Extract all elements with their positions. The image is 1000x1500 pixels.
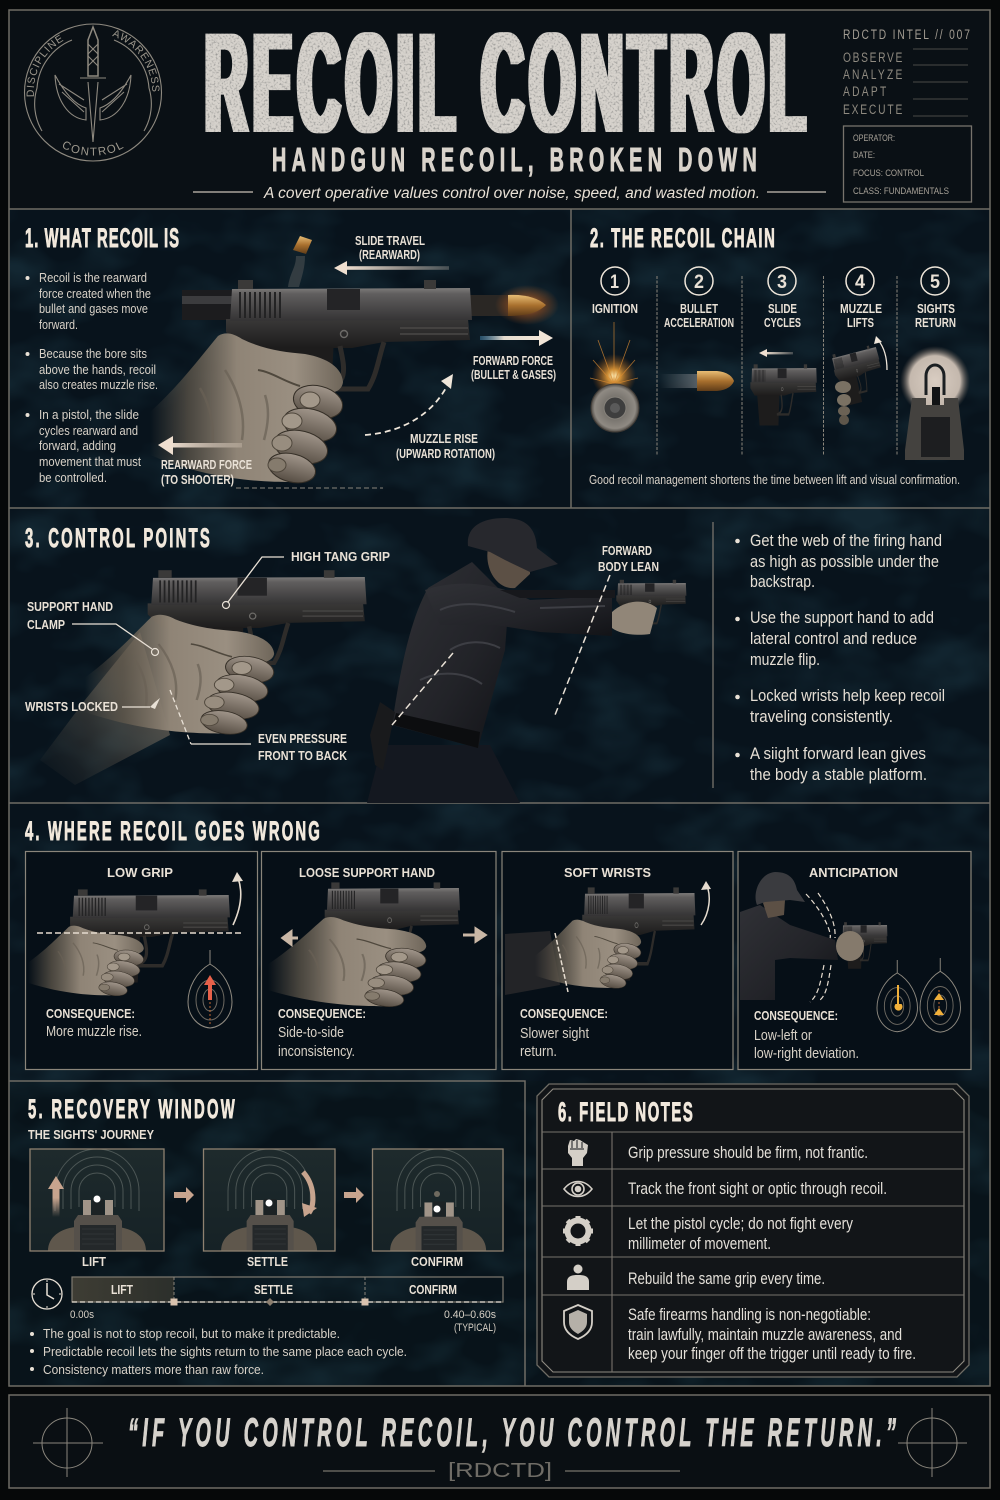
timeline bar: 0.00s xyxy=(70,1309,94,1321)
panel 3: control points xyxy=(25,518,945,803)
step 3 slide cycles xyxy=(750,267,817,426)
wrists locked callout: WRISTS LOCKED xyxy=(25,700,118,714)
high tang grip callout xyxy=(222,550,390,608)
support hand clamp callout: CLAMP xyxy=(27,618,65,632)
muzzle rise arrow xyxy=(365,374,453,435)
bullet list 1: force created when the xyxy=(39,286,151,301)
step 4 muzzle lifts: MUZZLE xyxy=(840,302,882,316)
bullet list 1: also creates muzzle rise. xyxy=(39,377,158,392)
quote: “IF YOU CONTROL RECOIL, YOU CONTROL THE RETURN.” xyxy=(128,1409,896,1455)
field notes frame xyxy=(537,1084,969,1377)
even pressure callout xyxy=(170,690,347,763)
control bullet list: Use the support hand to add xyxy=(750,608,934,627)
step 5 sights return: SIGHTS xyxy=(917,302,955,316)
crest emblem xyxy=(24,24,162,161)
intel list: OBSERVE xyxy=(843,50,902,65)
intel list: RDCTD INTEL // 007 xyxy=(843,27,970,42)
note row: safety: keep your finger off the trigger until ready to fire. xyxy=(628,1345,916,1363)
shooter figure xyxy=(367,518,686,803)
heading 2: 2. THE RECOIL CHAIN xyxy=(590,222,775,253)
flow arrow 2 xyxy=(344,1187,364,1203)
timeline bar xyxy=(70,1277,503,1334)
icon: gear xyxy=(563,1216,593,1246)
panel 1: what recoil is xyxy=(25,222,559,488)
header xyxy=(24,4,972,203)
pistol main xyxy=(226,280,472,413)
muzzle rise label: (UPWARD ROTATION) xyxy=(396,447,495,461)
card: soft wrists: Slower sight xyxy=(520,1026,589,1042)
bullet list 1: forward, adding xyxy=(39,438,116,453)
recovery bullet list: The goal is not to stop recoil, but to make it predictable. xyxy=(43,1326,340,1341)
intel list: ADAPT xyxy=(843,84,887,99)
card: anticipation: ANTICIPATION xyxy=(809,866,898,880)
bullet list 1: forward. xyxy=(39,317,78,332)
heading 3: 3. CONTROL POINTS xyxy=(25,522,210,553)
note row: grip xyxy=(568,1139,868,1166)
control bullet list: Get the web of the firing hand xyxy=(750,531,942,550)
slide travel label xyxy=(355,234,425,262)
timeline bar: SETTLE xyxy=(254,1283,293,1297)
operator box xyxy=(844,126,972,202)
intel list xyxy=(843,27,970,117)
card: loose support hand: Side-to-side xyxy=(278,1025,344,1041)
title: RECOIL CONTROL xyxy=(205,4,805,163)
timeline bar: LIFT xyxy=(111,1283,133,1297)
step 4 muzzle lifts: 4 xyxy=(855,272,865,293)
control bullet list xyxy=(735,531,945,784)
note row: safety: train lawfully, maintain muzzle awareness, and xyxy=(628,1326,902,1344)
bullet list 1: be controlled. xyxy=(39,470,107,485)
panel 6: field notes xyxy=(537,1084,969,1377)
rearward force label xyxy=(161,458,252,487)
heading 4: 4. WHERE RECOIL GOES WRONG xyxy=(25,815,320,846)
control bullet list: muzzle flip. xyxy=(750,650,820,669)
operator box: CLASS: FUNDAMENTALS xyxy=(853,186,949,197)
intel list: EXECUTE xyxy=(843,102,902,117)
step 5 sights return: RETURN xyxy=(915,316,956,330)
note row: cycle: Let the pistol cycle; do not fight every xyxy=(628,1215,854,1233)
card: loose support hand: CONSEQUENCE: xyxy=(278,1007,366,1021)
step 2 bullet acceleration: ACCELERATION xyxy=(664,316,734,330)
operator box: OPERATOR: xyxy=(853,133,895,144)
control bullet list: as high as possible under the xyxy=(750,552,939,571)
icon: person xyxy=(567,1264,589,1290)
card: soft wrists xyxy=(502,852,733,1070)
sight frame: confirm: CONFIRM xyxy=(411,1255,463,1269)
card: anticipation xyxy=(738,852,971,1070)
heading 6: 6. FIELD NOTES xyxy=(558,1096,693,1127)
heading 1: 1. WHAT RECOIL IS xyxy=(25,222,179,253)
card: low grip xyxy=(26,852,258,1070)
rearward force label: REARWARD FORCE xyxy=(161,458,252,472)
control bullet list: A siight forward lean gives xyxy=(750,744,926,763)
bullet list 1: In a pistol, the slide xyxy=(39,407,139,422)
operator box: DATE: xyxy=(853,150,875,161)
sub-heading: THE SIGHTS' JOURNEY xyxy=(28,1128,155,1142)
muzzle rise label: MUZZLE RISE xyxy=(410,432,478,446)
wrists locked callout xyxy=(25,698,160,714)
note row: grip: Grip pressure should be firm, not frantic. xyxy=(628,1144,868,1162)
icon: clock xyxy=(32,1279,62,1309)
step 2 bullet acceleration: BULLET xyxy=(680,302,718,316)
forward body lean label: FORWARD xyxy=(602,544,652,558)
bullet list 1 xyxy=(26,270,158,485)
card: soft wrists: SOFT WRISTS xyxy=(564,866,651,880)
brand mark: [RDCTD] xyxy=(448,1460,552,1482)
recovery bullet list xyxy=(30,1326,407,1377)
card: low grip: More muzzle rise. xyxy=(46,1024,142,1040)
bullet list 1: cycles rearward and xyxy=(39,423,138,438)
panel 2: the recoil chain xyxy=(589,222,970,487)
slide travel label: SLIDE TRAVEL xyxy=(355,234,425,248)
step 5 sights return xyxy=(900,267,970,460)
support hand clamp callout xyxy=(27,600,158,656)
flow arrow 1 xyxy=(174,1187,194,1203)
note row: cycle: millimeter of movement. xyxy=(628,1235,771,1253)
step 5 sights return: 5 xyxy=(930,272,940,293)
rearward force label: (TO SHOOTER) xyxy=(161,473,234,487)
sight frame: confirm xyxy=(372,1149,504,1269)
control bullet list: the body a stable platform. xyxy=(750,765,927,784)
icon: fist xyxy=(568,1139,588,1166)
note row: rebuild: Rebuild the same grip every time. xyxy=(628,1270,825,1288)
forearm xyxy=(40,632,170,785)
slide travel arrow xyxy=(334,261,449,275)
subtitle: HANDGUN RECOIL, BROKEN DOWN xyxy=(272,141,757,178)
timeline bar: 0.40–0.60s xyxy=(444,1309,496,1321)
recovery bullet list: Consistency matters more than raw force. xyxy=(43,1362,264,1377)
rearward force arrow xyxy=(158,436,242,455)
card: soft wrists: return. xyxy=(520,1044,557,1060)
bullet list 1: Recoil is the rearward xyxy=(39,270,147,285)
ejected casing xyxy=(288,236,312,287)
forward force label: (BULLET & GASES) xyxy=(471,368,556,382)
icon: shield xyxy=(564,1305,592,1339)
timeline bar: CONFIRM xyxy=(409,1283,457,1297)
card: low grip: LOW GRIP xyxy=(107,866,173,880)
step 4 muzzle lifts: LIFTS xyxy=(847,316,874,330)
step 3 slide cycles: CYCLES xyxy=(764,316,801,330)
timeline bar: (TYPICAL) xyxy=(454,1322,496,1334)
forward body lean label: BODY LEAN xyxy=(598,560,659,574)
step 1 ignition: IGNITION xyxy=(592,302,638,316)
reticle left xyxy=(33,1408,103,1477)
even pressure callout: EVEN PRESSURE xyxy=(258,732,347,746)
bullet list 1: Because the bore sits xyxy=(39,346,147,361)
recovery bullet list: Predictable recoil lets the sights return to the same place each cycle. xyxy=(43,1344,407,1359)
step 1 ignition xyxy=(590,267,639,432)
even pressure callout: FRONT TO BACK xyxy=(258,749,347,763)
firing hand xyxy=(150,333,346,487)
step 2 bullet acceleration xyxy=(660,267,734,391)
card: loose support hand xyxy=(262,852,496,1070)
step 4 muzzle lifts xyxy=(830,267,888,425)
step 1 ignition: 1 xyxy=(610,272,619,293)
note row: safety: Safe firearms handling is non-negotiable: xyxy=(628,1306,871,1324)
card: low grip: CONSEQUENCE: xyxy=(46,1007,135,1021)
card: loose support hand: LOOSE SUPPORT HAND xyxy=(299,866,435,880)
panel 5: recovery window xyxy=(28,1093,504,1377)
step 3 slide cycles: SLIDE xyxy=(768,302,797,316)
sight frame: settle: SETTLE xyxy=(247,1255,288,1269)
card: soft wrists: CONSEQUENCE: xyxy=(520,1007,608,1021)
footer xyxy=(33,1408,967,1482)
crest text: AWARENESS xyxy=(112,30,160,92)
sight frame: settle xyxy=(204,1149,335,1269)
bullet list 1: movement that must xyxy=(39,454,141,469)
card: anticipation: low-right deviation. xyxy=(754,1046,859,1062)
forward force arrow xyxy=(480,330,553,346)
tagline: A covert operative values control over noise, speed, and wasted motion. xyxy=(263,185,760,202)
control bullet list: traveling consistently. xyxy=(750,707,893,726)
step 2 bullet acceleration: 2 xyxy=(694,272,704,293)
bullet list 1: above the hands, recoil xyxy=(39,362,156,377)
step 3 slide cycles: 3 xyxy=(777,272,787,293)
forward body lean label xyxy=(598,544,659,574)
control bullet list: backstrap. xyxy=(750,572,815,591)
high tang grip callout: HIGH TANG GRIP xyxy=(291,550,390,564)
body lean dashed lines xyxy=(392,575,610,725)
forward force label: FORWARD FORCE xyxy=(473,354,553,368)
operator box: FOCUS: CONTROL xyxy=(853,168,924,179)
card: anticipation: Low-left or xyxy=(754,1028,812,1044)
note row: cycle xyxy=(563,1215,854,1253)
bullet list 1: bullet and gases move xyxy=(39,301,148,316)
crest text xyxy=(26,30,160,156)
control bullet list: Locked wrists help keep recoil xyxy=(750,686,945,705)
intel list: ANALYZE xyxy=(843,67,902,82)
sight frame: lift: LIFT xyxy=(82,1255,106,1269)
crest text: DISCIPLINE xyxy=(26,34,64,96)
heading 5: 5. RECOVERY WINDOW xyxy=(28,1093,235,1124)
pistol grip close-up xyxy=(148,570,367,683)
sight frame: lift xyxy=(30,1149,164,1269)
reticle right xyxy=(898,1408,967,1477)
card: loose support hand: inconsistency. xyxy=(278,1044,355,1060)
note row: eye: Track the front sight or optic through recoil. xyxy=(628,1180,887,1198)
support hand xyxy=(85,615,277,738)
note row: rebuild xyxy=(567,1264,825,1290)
card: anticipation: CONSEQUENCE: xyxy=(754,1009,838,1023)
forward force label xyxy=(471,354,556,382)
icon: eye xyxy=(564,1182,592,1196)
support hand clamp callout: SUPPORT HAND xyxy=(27,600,113,614)
control bullet list: lateral control and reduce xyxy=(750,629,917,648)
muzzle barrel and bullet xyxy=(182,285,559,325)
slide travel label: (REARWARD) xyxy=(359,248,420,262)
note row: eye xyxy=(564,1180,887,1198)
panel 4: where recoil goes wrong xyxy=(25,815,971,1070)
muzzle rise label xyxy=(396,432,495,461)
note row: safety xyxy=(564,1305,916,1363)
crest text: CONTROL xyxy=(63,142,124,156)
